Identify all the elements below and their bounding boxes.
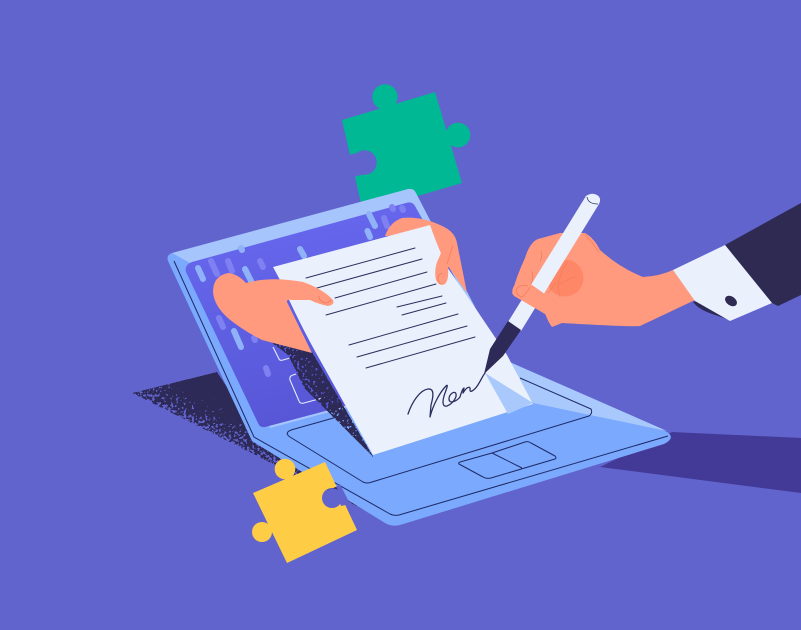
shirt cuff (673, 245, 772, 321)
green puzzle piece (342, 84, 470, 212)
pen nib (484, 321, 521, 374)
code dashes on the screen (198, 207, 403, 374)
stippled shadow under the paper (268, 340, 374, 458)
yellow puzzle piece (252, 459, 357, 563)
outlined boxes on the screen (273, 347, 326, 403)
laptop edge lines (174, 261, 668, 515)
cuff shadow (693, 300, 730, 320)
far hand finger over the paper (435, 239, 457, 285)
paper text lines (306, 248, 475, 368)
stippled floor shadow on the left (132, 372, 392, 524)
pen cap curve (587, 197, 598, 204)
paper sheet (273, 225, 533, 455)
near hand holding the paper (213, 273, 333, 353)
base light back corner (505, 360, 667, 431)
hand back (512, 233, 695, 327)
signing hand with pen (484, 194, 801, 374)
signature (408, 373, 485, 417)
far hand behind the paper (385, 218, 467, 293)
pen body (508, 194, 600, 331)
cufflink (723, 294, 739, 308)
laptop shadow on the right (600, 432, 801, 493)
palm shading (546, 260, 584, 296)
paper fold (485, 373, 533, 414)
index finger over the pen (512, 283, 552, 324)
screen display (186, 202, 503, 427)
laptop base (168, 253, 671, 526)
laptop (168, 189, 671, 526)
sleeve (725, 203, 801, 306)
screen frame (172, 189, 505, 428)
signed paper (273, 225, 533, 455)
